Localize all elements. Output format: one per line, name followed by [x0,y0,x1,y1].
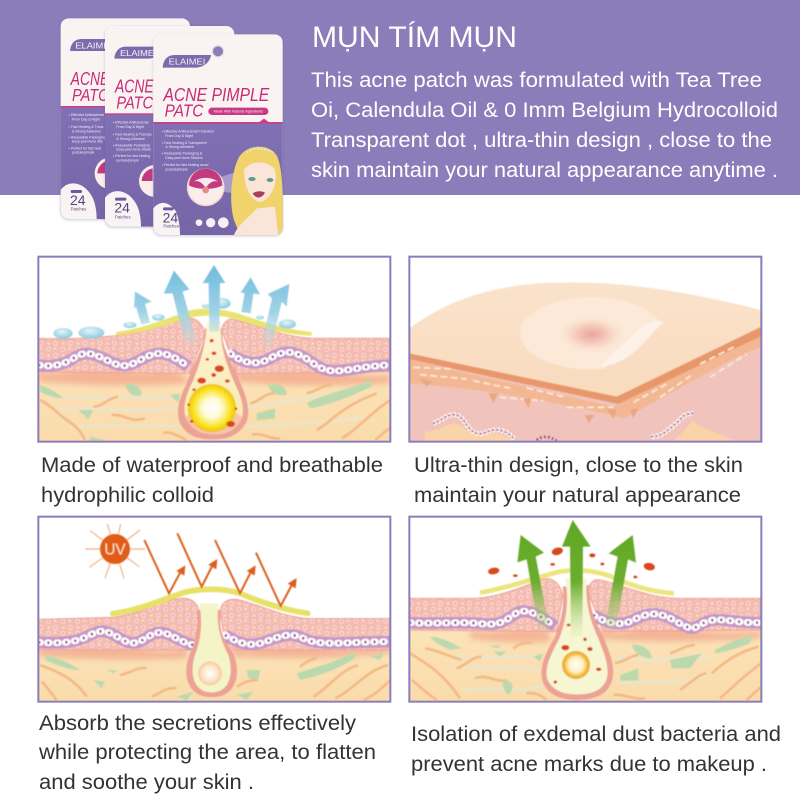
caption: waterproof: hydrophilic colloid [41,484,214,507]
packet: middle: Easy-peel Acne Sticke [116,147,151,151]
packet: back: • Fast Healing & Trans [69,125,104,129]
caption: isolation: prevent acne marks due to makeup . [411,753,767,776]
dermis pockets with basal cells [425,413,737,442]
packet: back [61,18,190,219]
packet: back: 24 [70,192,86,208]
packet: back: • Effective Antibacterial [69,113,104,117]
epidermis cell layer [409,579,761,632]
caption: absorb [38,712,376,794]
follicle with pus [178,322,248,439]
yellow patch [116,309,312,336]
orange skin edge [409,335,761,418]
panel: ultra-thin patch on skin [409,257,761,442]
packet: middle: ACNE [114,76,154,97]
panel: UV protection [38,517,390,702]
packet: back: pustule/pimple [72,151,95,155]
packet: back: & Strong Adhesive [72,129,101,133]
caption: waterproof: Made of waterproof and breathable [41,454,383,477]
packet: middle: PATC [116,93,154,113]
packet: middle: ELAIMEI [120,48,157,58]
packet: back: • Perfect for fast heal [69,146,101,150]
packet: back: Easy-peel Acne Stic [72,140,103,144]
packet: middle: 24 [114,200,130,216]
packet: middle: From Day & Night [116,125,144,129]
caption: absorb: and soothe your skin . [39,771,254,794]
packet: front: Made With Natural Ingredients [214,110,263,114]
packet: middle: • Resealable Packaging [113,143,150,147]
packet: front: PATC [165,101,204,121]
basal cells [38,631,390,645]
green release arrows [517,520,636,637]
transparent patch with pimple [520,297,663,369]
icon: UV sun: UV [104,542,126,559]
intro text [311,68,778,182]
panel: isolation from bacteria [409,517,761,702]
packet: back: Patches [71,207,86,212]
pimple close-up circle [188,168,248,205]
caption: isolation [411,723,781,776]
intro text: This acne patch was formulated with Tea Tree [311,68,762,92]
dermis [38,363,390,442]
top surface of skin [409,282,761,397]
dermis [39,650,390,701]
cartoon woman [231,147,283,235]
caption: absorb: Absorb the secretions effectively [39,712,357,735]
packet: front: pustule/pimple [165,167,188,171]
icon: UV sun [85,524,145,578]
packet: back: PATC [72,85,109,105]
packet: front: From Day & Night [165,134,193,138]
intro text: skin maintain your natural appearance anytime . [311,158,778,182]
caption: ultra-thin: Ultra-thin design, close to the skin [414,454,743,477]
bacteria particles [488,546,656,578]
intro text: Transparent dot , ultra-thin design , close to the [311,128,772,152]
caption: ultra-thin: maintain your natural appearance [414,484,741,507]
packet: front: ACNE PIMPLE [162,84,270,105]
packet: front: • Resealable Packaging & [162,152,203,156]
packet: middle: & Strong Adhesive [116,137,145,141]
basal cells [409,611,761,628]
packet: front: Easy-peel Acne Stickers [165,156,203,160]
packet: middle [105,26,234,227]
packet: middle: • Effective Antibacterial [113,121,149,125]
packet: front: 24 [163,209,178,225]
water droplets [53,298,296,339]
basal cells [38,352,390,371]
packet: front: ELAIMEI [169,57,205,67]
packet: front [153,34,283,235]
breathable arrows [134,265,289,347]
panel: waterproof and breathable colloid [38,257,390,442]
caption: isolation: Isolation of exdemal dust bacteria and [411,723,781,746]
packet: middle: • Perfect for fast healing [113,154,150,158]
packet: front: Patches [163,223,179,228]
intro text: Oi, Calendula Oil & 0 Imm Belgium Hydrocolloid [311,98,778,122]
epidermis cell layer [38,318,390,373]
packet: front: • Perfect for fast healing acne/ [162,163,209,167]
packet: back: From Day & Night [72,117,100,121]
packet: back: ELAIMEI [75,41,112,51]
packet: front: • Fast Healing & Transparent [162,141,207,145]
packet: front: & Strong Adhesive [165,145,194,149]
yellow patch [113,589,308,614]
packet: middle: Patches [115,214,131,219]
skin cross-section [410,346,760,441]
reflected UV arrows [144,533,292,606]
yellow patch [480,570,674,593]
follicle healed [186,603,237,697]
product: three patch packets [61,18,283,235]
caption: ultra-thin [414,454,743,507]
follicle with shrinking pus [541,578,613,700]
packet: back: • Resealable Packaging [69,136,106,140]
packet: middle: • Fast Healing & Transpa [113,133,152,137]
header band [0,0,800,195]
title: MỤN TÍM MỤN [312,21,517,54]
packet: middle: pustule/pimple [116,158,139,162]
dermis [409,625,761,702]
packet: front: • Effective Antibacterial Protection [162,130,214,134]
caption: absorb: while protecting the area, to flatten [38,741,376,764]
packet: back: ACNE [70,68,110,89]
epidermis cell layer [38,598,390,650]
caption: waterproof [41,454,383,507]
